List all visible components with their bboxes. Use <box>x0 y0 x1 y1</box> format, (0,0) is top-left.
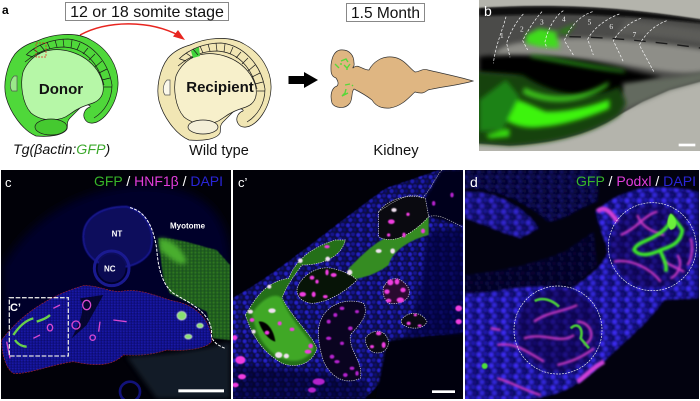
Podxl signal <box>491 212 692 395</box>
panel d: glomeruli <box>464 170 699 400</box>
panel c: whole section fluorescence: NC <box>104 265 116 274</box>
somite boundaries <box>493 11 667 73</box>
kidney label: Kidney <box>373 143 419 159</box>
panel label c: c <box>5 175 12 190</box>
panel c: whole section fluorescence <box>1 170 231 401</box>
kidney tissue <box>2 286 212 374</box>
neural tube and notochord <box>83 207 152 267</box>
panel label c': c’ <box>238 175 248 190</box>
arrow: donor to recipient <box>80 24 185 40</box>
genotype label: Tg(βactin:GFP) <box>13 142 110 158</box>
fish body <box>476 6 700 146</box>
GFP signal <box>479 23 626 138</box>
somite numbers <box>500 16 636 38</box>
panel label a: a <box>2 3 9 17</box>
somite numbers: 1 <box>500 31 504 40</box>
panel b: live fish image <box>476 0 700 151</box>
GFP signal <box>634 215 682 272</box>
green grafted tubules <box>335 59 353 96</box>
duct outlines <box>297 196 429 381</box>
recipient embryo <box>158 38 271 140</box>
somite numbers: 5 <box>588 18 592 27</box>
recipient label: Recipient <box>186 79 254 96</box>
donor embryo <box>5 34 118 136</box>
dark yolk region <box>479 52 661 96</box>
DAPI nuclei field <box>232 170 465 398</box>
glomerulus outlines <box>514 203 696 374</box>
panel label b: b <box>484 3 492 19</box>
stage label box: 1.5 Month: 1.5 Month <box>351 5 420 22</box>
panel c: whole section fluorescence: NT <box>112 230 122 239</box>
DAPI field <box>464 170 699 400</box>
panel c: whole section fluorescence: Myotome <box>170 221 206 230</box>
panel c: whole section fluorescence: C’ <box>10 302 21 314</box>
HNF1β nuclei <box>232 213 462 387</box>
channel legend c: GFP / HNF1β / DAPI <box>94 173 223 189</box>
channel legend d: GFP / Podxl / DAPI <box>576 173 696 189</box>
donor label: Donor <box>39 81 83 98</box>
somite numbers: 3 <box>540 18 544 27</box>
myotome <box>158 238 230 340</box>
tubule signals <box>7 300 127 358</box>
arrow: to kidney <box>288 72 318 88</box>
kidney illustration <box>331 50 473 108</box>
GFP tubule <box>245 240 345 365</box>
somite numbers: 4 <box>562 14 566 23</box>
panel label d: d <box>470 174 478 190</box>
wild type label: Wild type <box>189 143 249 159</box>
somite numbers: 2 <box>520 25 524 34</box>
panel c': magnified tubules <box>232 170 465 399</box>
scale bar <box>679 144 695 146</box>
somite numbers: 6 <box>609 22 613 31</box>
stage label box: 12 or 18 somite stage: 12 or 18 somite stage <box>70 4 224 21</box>
somite numbers: 7 <box>633 30 637 39</box>
